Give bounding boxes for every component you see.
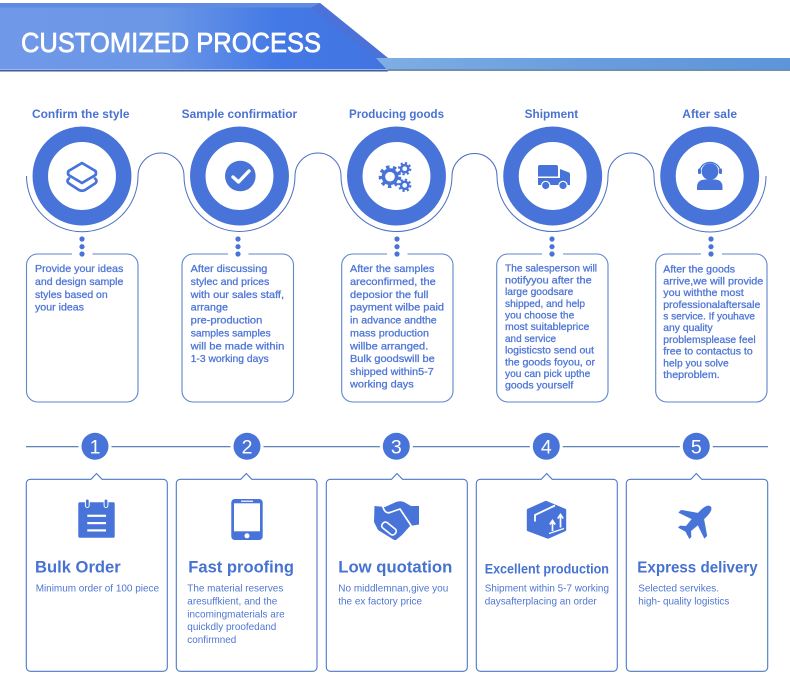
panel: step 4 description: shipped, and help [505,299,585,310]
icon: layers [68,163,96,191]
panel: step 5 description: problemsplease feel [663,335,756,346]
step headings [32,108,738,121]
panel: express delivery card: Express delivery [637,559,758,576]
panel: step 3 description: payment wilbe paid [350,303,444,314]
panel: step 4 description: and service [505,334,556,345]
panel: fast proofing card: confirmned [187,635,237,646]
panel: step 5 description: free to contactus to [663,347,753,358]
panel: low quotation card [326,474,467,671]
panel: fast proofing card: quickdly proofedand [187,622,277,633]
panel: fast proofing card [176,474,317,671]
icon: truck [538,165,570,190]
panel: step 4 description: you choose the [505,310,575,322]
panel: step 4 description: goods yourself [505,381,573,392]
panel: fast proofing card: incomingmaterials are [187,609,285,620]
step headings: Confirm the style [32,108,130,121]
number 4: 4 [541,436,552,458]
panel: step 1 description: Provide your ideas [35,264,123,275]
panel: step 2 description: with our sales staff, [190,290,284,301]
panel: step 4 description: you can pick upthe [505,369,591,380]
panel: express delivery card: high- quality logistics [638,596,729,608]
step 4 ring with truck icon [511,134,594,218]
panel: step 5 description: any quality [663,323,713,334]
panel: step 5 description: theproblem. [663,370,720,381]
step headings: After sale [682,108,738,121]
panel: excellent production card: Shipment within 5-7 working [485,584,609,595]
panel: step 5 description: help you solve [663,358,729,369]
panel: step 4 description: logisticsto send out [505,346,594,357]
step 1 ring with layers icon [40,134,124,218]
panel: excellent production card: Excellent production [485,561,609,577]
panel: excellent production card: daysafterplacing an order [485,596,597,608]
panel: step 2 description: samples samples [191,328,271,339]
panel: step 1 description [26,254,138,402]
panel: step 3 description: working days [349,380,414,391]
panel: step 3 description: mass production [350,328,429,339]
panel: step 1 description: and design sample [35,277,124,288]
panel: step 4 description [497,254,608,402]
panel: step 5 description [656,254,767,402]
panel: step 2 description: arrange [191,303,228,314]
panel: step 3 description: Bulk goodswill be [350,354,435,365]
panel: excellent production card [476,474,617,671]
step 5 ring with headset icon [668,134,751,218]
icon: airplane [671,493,724,546]
panel: step 1 description: your ideas [35,303,84,314]
panel: bulk order card [26,474,167,671]
panel: step 4 description: The salesperson will [505,264,597,275]
panel: low quotation card: the ex factory price [338,596,422,608]
icon: package box [528,502,565,538]
header banner [0,3,790,72]
panel: low quotation card: Low quotation [338,557,452,576]
number 3 [380,430,413,463]
panel: step 3 description [342,254,453,402]
panel: fast proofing card: Fast proofing [188,557,294,576]
number 1 [78,430,112,463]
step 2 ring with check icon [198,134,281,218]
number 1: 1 [90,436,100,458]
panel: step 1 description: styles based on [35,290,108,301]
panel: bulk order card: Minimum order of 100 piece [36,584,159,595]
panel: step 3 description: in advance andthe [350,316,437,326]
panel: step 3 description: deposior the full [350,290,428,301]
icon: gears [380,163,410,191]
connecting curve [26,153,766,232]
panel: step 4 description: most suitableprice [505,322,590,333]
panel: step 3 description: shipped within5-7 [350,367,434,378]
icon: tablet [231,499,263,540]
panel: fast proofing card: aresuffkient, and the [187,596,278,608]
panel: step 3 description: willbe arranged. [349,341,428,352]
panel: fast proofing card: The material reserves [187,584,283,595]
panel: step 3 description: After the samples [350,264,434,275]
step headings: Producing goods [349,108,444,121]
number 5 [680,430,713,463]
number 4 [530,430,563,463]
panel: step 5 description: arrive,we will provide [663,276,764,287]
panel: step 5 description: After the goods [663,265,735,276]
panel: step 2 description: stylec and prices [191,277,269,288]
panel: step 2 description: pre-production [191,316,263,326]
number 2: 2 [242,436,252,458]
icon: check badge [225,161,256,191]
panel: express delivery card: Selected servikes. [638,584,719,595]
connector dots [79,236,714,257]
panel: step 2 description: will be made within [190,341,285,352]
numbered timeline [26,430,768,463]
panel: low quotation card: No middlemnan,give you [338,584,448,595]
panel: step 3 description: areconfirmed, the [350,277,436,288]
panel: step 4 description: notifyyou after the [505,275,592,286]
icon: support headset [697,162,722,190]
panel: bulk order card: Bulk Order [35,557,121,576]
icon: handshake [374,501,419,540]
number 3: 3 [391,436,402,458]
step headings: Sample confirmatior [182,108,298,121]
panel: step 4 description: the goods foyou, or [505,357,596,368]
panel: step 5 description: you withthe most [663,288,744,299]
panel: step 4 description: large goodsare [505,287,574,298]
icon: order notepad [78,499,115,538]
panel: step 2 description: After discussing [191,264,268,275]
title: CUSTOMIZED PROCESS [21,27,321,58]
panel: step 5 description: s service. If youhave [663,312,755,322]
number 2 [230,430,264,463]
panel: step 2 description [182,254,294,402]
step headings: Shipment [525,108,578,121]
panel: express delivery card [626,474,768,671]
panel: step 2 description: 1-3 working days [191,354,269,365]
panel: step 5 description: professionalaftersale [663,300,761,311]
number 5: 5 [691,436,702,458]
step 3 ring with gears icon [355,134,438,218]
